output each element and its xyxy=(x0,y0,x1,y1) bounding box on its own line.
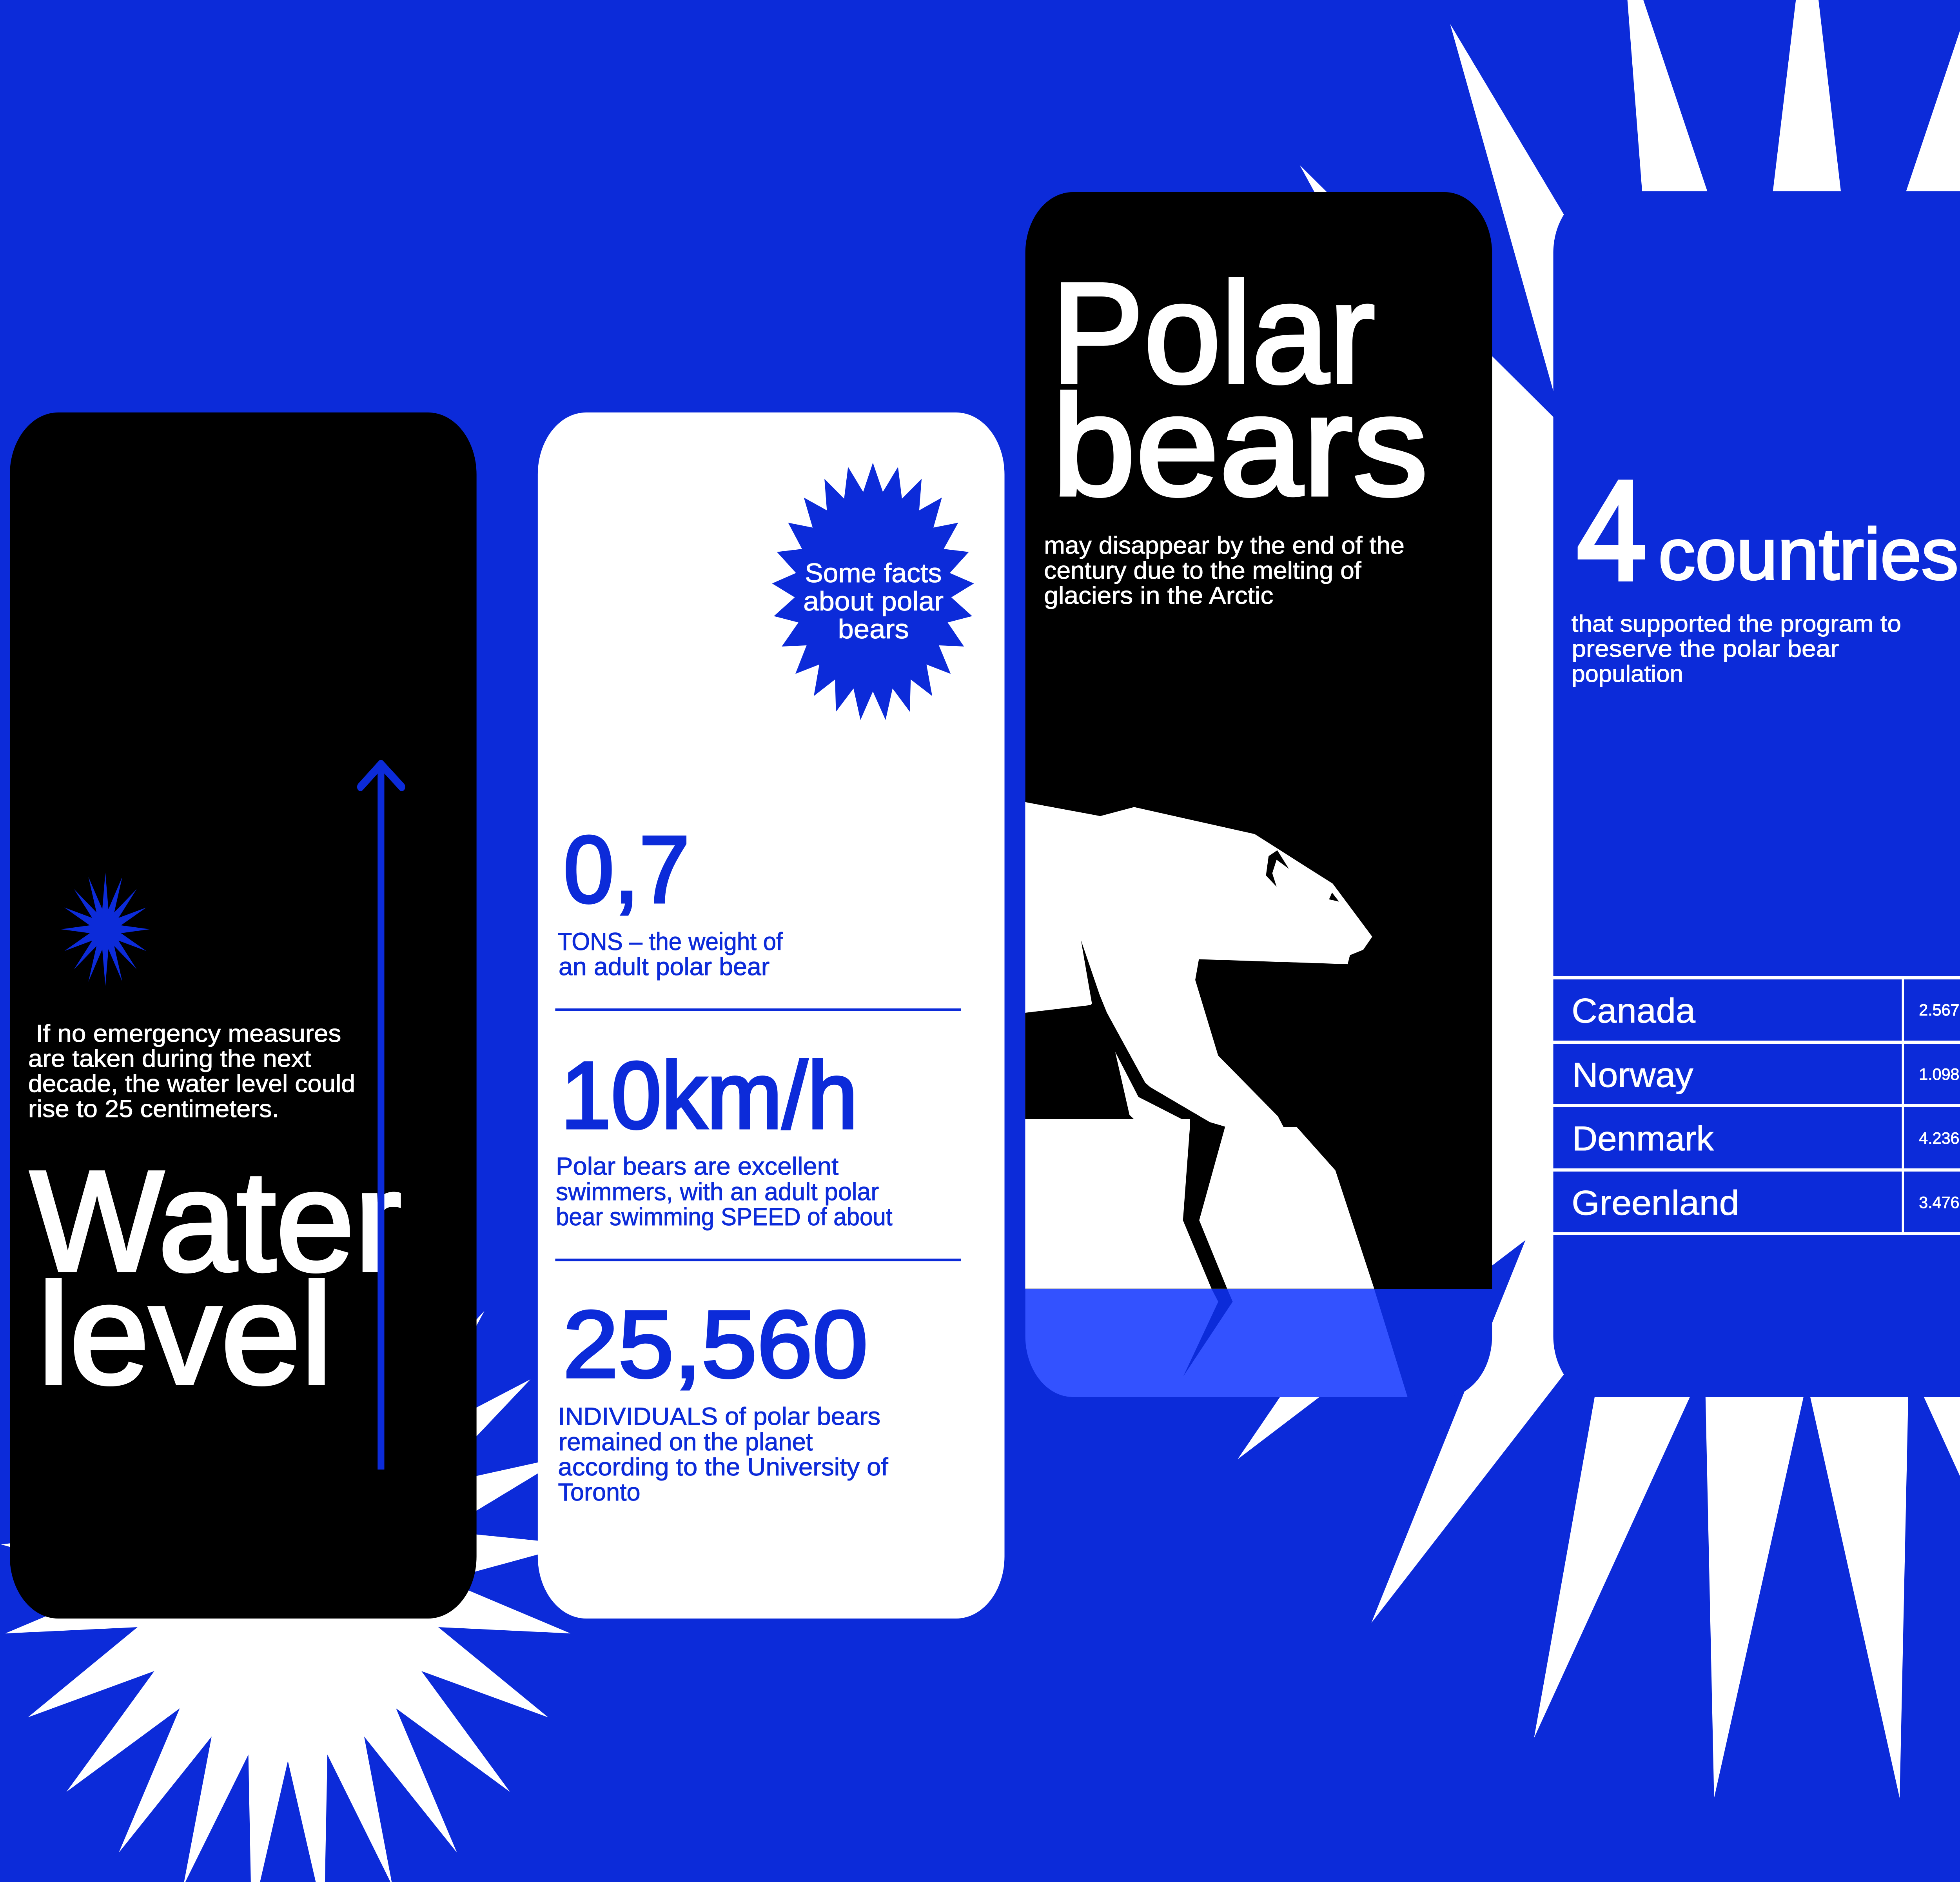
panel: some facts xyxy=(538,412,1004,1619)
stat: population: remained on the planet xyxy=(559,1428,813,1455)
heading: polar bears xyxy=(1051,253,1428,525)
stat: weight: an adult polar bear xyxy=(559,953,769,980)
illustration: polar bear on ice xyxy=(1025,802,1374,1289)
icon: facts starburst badge xyxy=(772,463,974,720)
text: countries description: preserve the polar bear xyxy=(1572,636,1839,662)
stat: population: Toronto xyxy=(558,1478,641,1506)
table: supporting countries: 3.476 xyxy=(1919,1193,1959,1212)
heading: 4 countries: 4 xyxy=(1577,452,1647,609)
text: badge label: Some facts xyxy=(805,558,942,589)
heading: water level: level xyxy=(38,1254,332,1414)
text: polar bears description: century due to the melting of xyxy=(1044,557,1361,584)
table: supporting countries: 2.567 xyxy=(1919,1001,1959,1019)
heading: water level xyxy=(30,1141,401,1414)
table: supporting countries: 4.236 xyxy=(1919,1129,1959,1147)
text: water level description: rise to 25 centimeters. xyxy=(28,1095,279,1122)
stat: weight xyxy=(558,817,783,980)
stat: population xyxy=(558,1292,888,1506)
table: supporting countries: Norway xyxy=(1572,1056,1693,1094)
stat: population: 25,560 xyxy=(563,1292,868,1397)
stat: population: according to the University of xyxy=(558,1453,888,1481)
heading: 4 countries xyxy=(1577,452,1958,609)
stat: swimming speed: Polar bears are excellent xyxy=(556,1152,838,1180)
text: water level description: are taken during the next xyxy=(28,1045,311,1072)
starburst: behind polar bears and countries cards xyxy=(1238,0,1960,1798)
starburst: behind water level card xyxy=(1,1311,575,1882)
stat: weight: TONS – the weight of xyxy=(558,928,783,955)
stat: swimming speed: 10km/h xyxy=(561,1043,858,1148)
text: badge label: about polar xyxy=(803,587,944,617)
text: badge label: bears xyxy=(838,614,909,645)
text: polar bears description: glaciers in the Arctic xyxy=(1044,582,1273,609)
heading: water level: Water xyxy=(30,1141,401,1301)
panel: polar bears xyxy=(1025,192,1492,1397)
text: polar bears description xyxy=(1044,532,1405,609)
table: supporting countries: Greenland xyxy=(1572,1184,1739,1222)
text: countries description: population xyxy=(1572,661,1683,687)
panel: countries xyxy=(1553,192,1960,1397)
table: supporting countries: Canada xyxy=(1572,992,1695,1030)
stat: population: INDIVIDUALS of polar bears xyxy=(558,1402,880,1430)
table: supporting countries xyxy=(1553,976,1960,1235)
text: water level description xyxy=(28,1020,355,1122)
text: countries description xyxy=(1572,611,1901,687)
arrow: rising water xyxy=(361,764,402,1470)
text: water level description: decade, the water level could xyxy=(28,1070,355,1097)
stat: swimming speed xyxy=(556,1043,893,1230)
stat: swimming speed: bear swimming SPEED of about xyxy=(556,1203,893,1230)
heading: polar bears: bears xyxy=(1052,366,1428,525)
text: polar bears description: may disappear by the end of the xyxy=(1044,532,1405,559)
stat: swimming speed: swimmers, with an adult polar xyxy=(556,1178,879,1205)
stat: weight: 0,7 xyxy=(563,817,690,923)
text: countries description: that supported the program to xyxy=(1572,611,1901,637)
water overlay xyxy=(1025,1289,1408,1397)
panel: water level xyxy=(10,412,477,1619)
text: water level description: If no emergency measures xyxy=(36,1020,341,1047)
heading: 4 countries: countries xyxy=(1658,514,1958,595)
table: supporting countries: Denmark xyxy=(1572,1119,1714,1158)
icon: small blue star xyxy=(61,872,150,986)
table: supporting countries: 1.098 xyxy=(1919,1065,1959,1083)
heading: polar bears: Polar xyxy=(1051,253,1375,413)
text: badge label xyxy=(803,558,944,645)
